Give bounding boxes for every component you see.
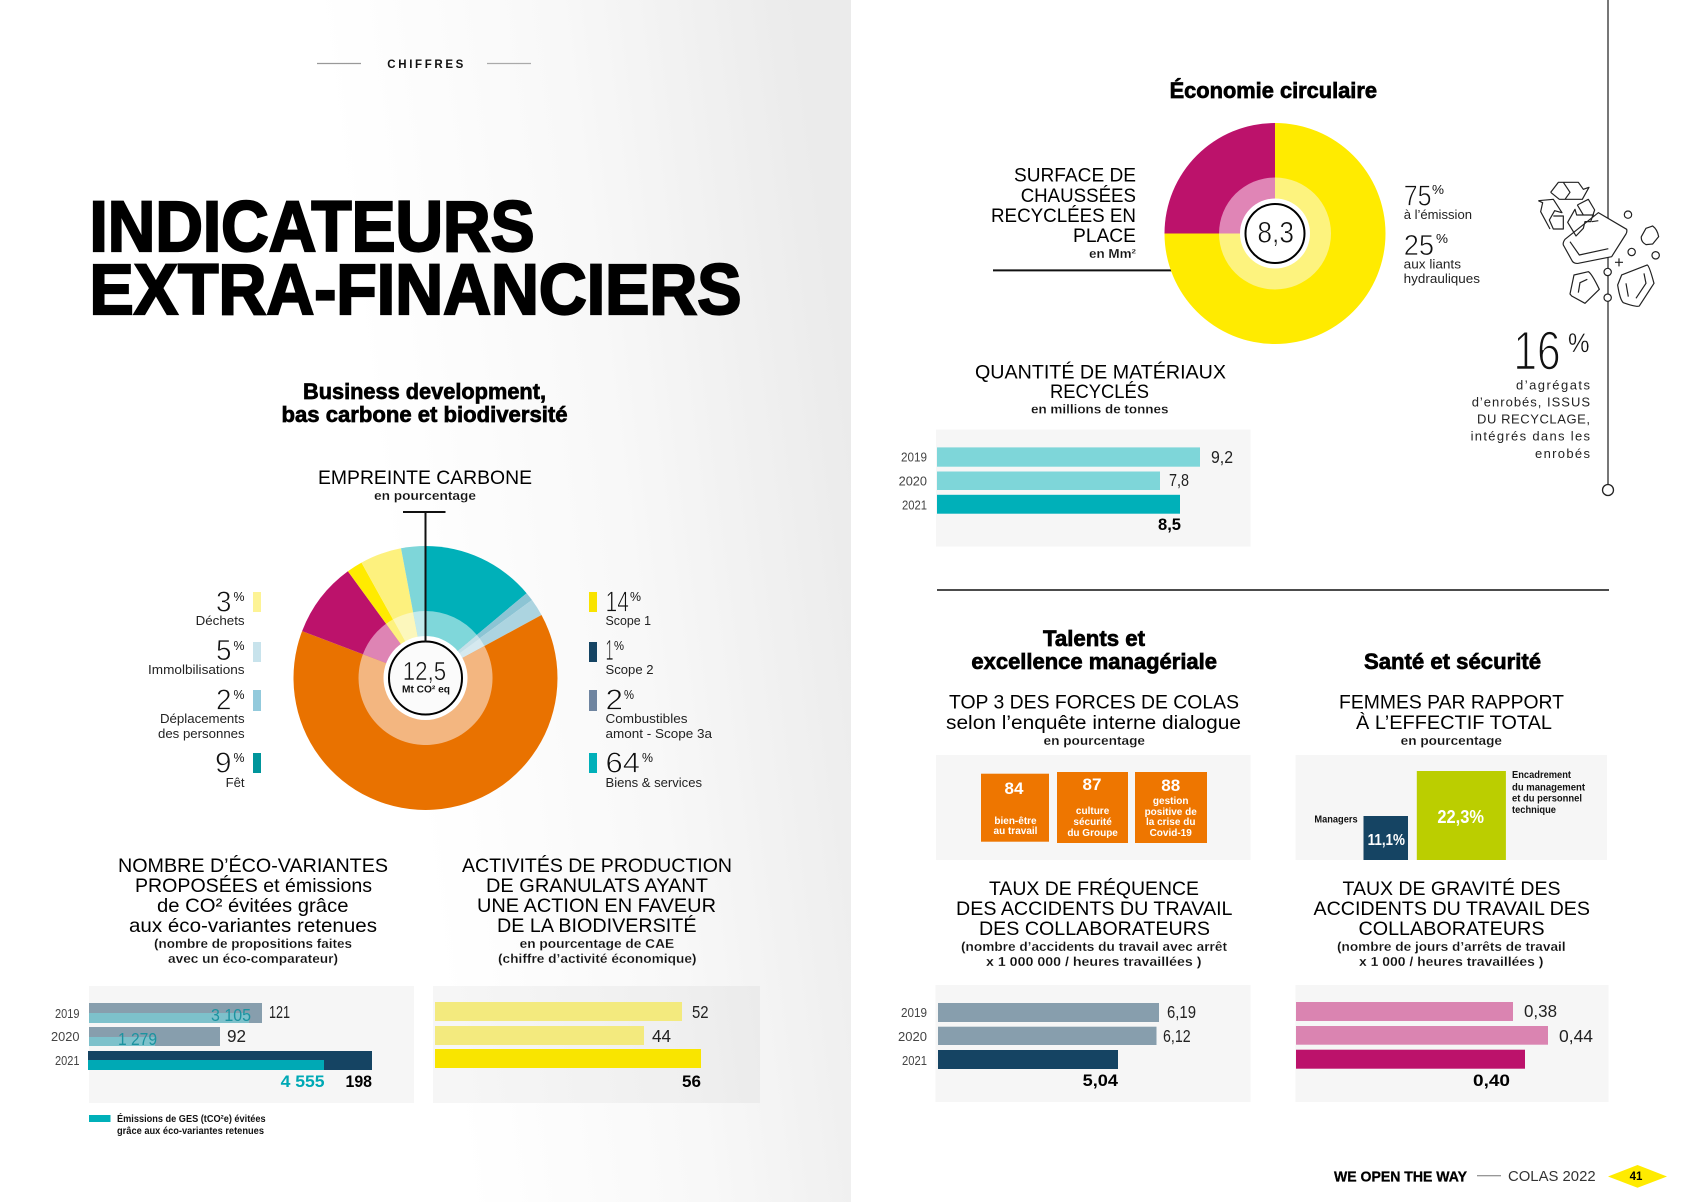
box: 88: Covid-19 — [1150, 828, 1192, 839]
legend item: combustibles: amont - Scope 3a — [606, 726, 713, 741]
legend: 75% et 25%: % — [1436, 231, 1448, 246]
heading: éco-variantes: de CO² évitées grâce — [157, 895, 348, 917]
heading: top 3: en pourcentage — [1044, 733, 1145, 748]
footer: WE OPEN THE WAY — [1334, 1170, 1467, 1186]
legend item: déplacements: % — [234, 687, 245, 702]
bar chart: éco-variantes: 2021 — [55, 1054, 80, 1068]
legend item: immobilisations: 5 — [216, 635, 232, 667]
bar chart: matériaux recyclés — [899, 430, 1250, 547]
heading: taux de fréquence — [956, 877, 1233, 969]
heading: top 3: TOP 3 DES FORCES DE COLAS — [949, 692, 1239, 714]
heading: taux de fréquence: DES ACCIDENTS DU TRAVAIL — [956, 898, 1233, 920]
bar chart: taux de fréquence — [898, 985, 1250, 1102]
donut chart: empreinte carbone — [293, 512, 557, 810]
heading: femmes: FEMMES PAR RAPPORT — [1339, 692, 1564, 714]
legend item: biens et services — [589, 748, 702, 790]
donut chart: empreinte carbone: 12,5 — [403, 656, 446, 686]
legend item: déchets: % — [234, 589, 245, 604]
section label: chiffres: CHIFFRES — [387, 59, 464, 71]
bar chart: granulats: 52 — [692, 1002, 709, 1022]
heading: matériaux recyclés — [975, 360, 1226, 417]
legend item: scope 1: 14 — [606, 586, 629, 618]
panel: femmes: Managers — [1314, 815, 1358, 826]
heading: granulats: UNE ACTION EN FAVEUR — [477, 895, 716, 917]
panel: femmes — [1296, 755, 1607, 860]
bar chart: éco-variantes: 1 279 — [118, 1029, 157, 1049]
bar chart: éco-variantes: 3 105 — [211, 1005, 251, 1025]
text: surface de chaussées: RECYCLÉES EN — [991, 204, 1136, 227]
legend item: scope 1: Scope 1 — [606, 613, 651, 628]
legend: émissions de GES: grâce aux éco-variantes retenues — [117, 1126, 264, 1137]
legend item: déplacements: des personnes — [158, 726, 245, 741]
heading: taux de fréquence: (nombre d’accidents du travail avec arrêt — [961, 939, 1228, 954]
icon: recycling and aggregates — [1538, 182, 1659, 306]
panel: femmes: 11,1% — [1368, 832, 1405, 849]
text: surface de chaussées: en Mm² — [1089, 246, 1137, 261]
legend item: scope 2: Scope 2 — [606, 662, 654, 677]
bar chart: taux de fréquence: 6,12 — [1163, 1026, 1191, 1046]
box: 88: la crise du — [1146, 817, 1195, 828]
legend: 75% et 25%: à l’émission — [1404, 207, 1472, 222]
box: 87 — [1057, 772, 1128, 843]
bar chart: matériaux recyclés: 2019 — [901, 450, 927, 464]
legend item: biens et services: % — [642, 750, 653, 765]
stat: 16%: DU RECYCLAGE, — [1477, 412, 1590, 427]
footer: COLAS 2022 — [1508, 1168, 1596, 1185]
box: 88 — [1135, 772, 1207, 843]
title: EXTRA-FINANCIERS — [90, 251, 742, 330]
footer — [1334, 1165, 1667, 1188]
text: surface de chaussées: PLACE — [1073, 225, 1136, 247]
vertical rule with end node — [1602, 0, 1614, 496]
box: 87: du Groupe — [1067, 828, 1118, 839]
box: 87: sécurité — [1073, 817, 1112, 828]
stat: 16%: 16 — [1513, 320, 1561, 382]
legend: 75% et 25%: aux liants — [1404, 256, 1462, 272]
box: 84 — [981, 774, 1049, 842]
legend: 75% et 25%: hydrauliques — [1404, 271, 1481, 286]
box: 84: bien-être — [994, 816, 1037, 827]
box: 88: positive de — [1145, 807, 1197, 818]
box: 87: 87 — [1083, 775, 1101, 794]
bar chart: matériaux recyclés: 9,2 — [1211, 447, 1233, 467]
box: 88: 88 — [1161, 776, 1180, 795]
legend item: fêt: Fêt — [226, 775, 245, 790]
heading: talents — [971, 626, 1217, 674]
heading: taux de fréquence: TAUX DE FRÉQUENCE — [989, 877, 1199, 900]
heading: santé et sécurité: Santé et sécurité — [1364, 649, 1541, 674]
heading: femmes — [1339, 692, 1564, 748]
legend item: combustibles — [589, 684, 713, 741]
bar chart: éco-variantes: 4 555 — [281, 1072, 325, 1091]
heading: matériaux recyclés: RECYCLÉS — [1050, 380, 1149, 403]
heading: matériaux recyclés: en millions de tonnes — [1031, 402, 1168, 417]
donut chart: surface recyclée: 8,3 — [1257, 217, 1294, 250]
heading: taux de gravité: x 1 000 / heures travaillées ) — [1359, 954, 1543, 969]
text: surface de chaussées — [991, 164, 1172, 270]
bar chart: taux de gravité: 0,40 — [1473, 1071, 1510, 1090]
heading: taux de fréquence: DES COLLABORATEURS — [979, 918, 1210, 940]
stat: 16%: d’agrégats — [1516, 378, 1590, 393]
page number badge — [1608, 1165, 1667, 1188]
legend item: combustibles: Combustibles — [606, 711, 688, 726]
legend item: scope 1: % — [630, 589, 641, 604]
heading: éco-variantes: aux éco-variantes retenues — [129, 915, 377, 937]
stat: 16%: % — [1568, 328, 1590, 358]
donut chart: surface recyclée — [1164, 123, 1386, 344]
heading: granulats — [462, 854, 732, 966]
heading: matériaux recyclés: QUANTITÉ DE MATÉRIAUX — [975, 360, 1226, 384]
heading: granulats: (chiffre d’activité économique) — [498, 951, 696, 966]
title — [90, 188, 742, 330]
title: INDICATEURS — [90, 188, 534, 267]
bar chart: granulats: 44 — [652, 1026, 671, 1046]
heading: éco-variantes: (nombre de propositions faites — [154, 936, 352, 951]
bar chart: matériaux recyclés: 8,5 — [1158, 515, 1181, 534]
heading: business development: Business development, — [303, 379, 546, 404]
bar chart: taux de fréquence: 5,04 — [1083, 1071, 1119, 1090]
heading: taux de gravité — [1314, 877, 1590, 969]
legend item: scope 2: % — [614, 638, 624, 653]
bar chart: taux de gravité — [1296, 985, 1608, 1102]
heading: empreinte carbone: en pourcentage — [374, 488, 476, 503]
page number badge: 41 — [1630, 1171, 1643, 1183]
heading: empreinte carbone — [318, 467, 532, 503]
bar chart: éco-variantes: 121 — [269, 1002, 290, 1022]
legend: émissions de GES — [89, 1112, 266, 1137]
legend item: fêt: % — [234, 750, 245, 765]
legend item: fêt — [215, 748, 261, 790]
legend item: combustibles: % — [624, 687, 634, 702]
heading: éco-variantes: PROPOSÉES et émissions — [135, 874, 372, 897]
bar chart: matériaux recyclés: 2021 — [902, 498, 927, 512]
legend item: scope 1 — [589, 586, 651, 628]
box: 88: gestion — [1153, 796, 1188, 807]
panel: femmes: et du personnel — [1512, 794, 1582, 805]
heading: granulats: en pourcentage de CAE — [520, 936, 674, 951]
heading: femmes: en pourcentage — [1401, 733, 1502, 748]
heading: empreinte carbone: EMPREINTE CARBONE — [318, 467, 532, 489]
bar chart: éco-variantes: 2020 — [51, 1030, 80, 1044]
bar chart: granulats: 56 — [682, 1072, 701, 1091]
legend item: déplacements: 2 — [216, 684, 232, 716]
heading: taux de gravité: COLLABORATEURS — [1358, 918, 1544, 940]
heading: talents: excellence managériale — [971, 649, 1217, 674]
panel: femmes: technique — [1512, 805, 1556, 816]
bar chart: éco-variantes — [51, 986, 414, 1103]
bar chart: matériaux recyclés: 2020 — [899, 474, 927, 488]
legend item: fêt: 9 — [215, 748, 232, 780]
panel: femmes: 22,3% — [1437, 807, 1484, 827]
bar chart: taux de gravité: 0,38 — [1524, 1001, 1557, 1021]
bar chart: éco-variantes: 92 — [227, 1026, 246, 1046]
legend item: déplacements — [158, 684, 261, 741]
legend item: immobilisations: Immolbilisations — [148, 662, 245, 677]
legend item: biens et services: 64 — [606, 748, 640, 780]
heading: taux de gravité: ACCIDENTS DU TRAVAIL DES — [1314, 898, 1590, 920]
legend item: déchets: Déchets — [196, 613, 245, 628]
legend item: biens et services: Biens & services — [606, 775, 702, 790]
heading: taux de gravité: TAUX DE GRAVITÉ DES — [1342, 877, 1560, 900]
heading: granulats: DE LA BIODIVERSITÉ — [497, 914, 696, 937]
heading: talents: Talents et — [1043, 626, 1146, 651]
legend: 75% et 25% — [1404, 180, 1481, 286]
legend item: immobilisations — [148, 635, 261, 677]
box: 87: culture — [1076, 806, 1110, 817]
text: surface de chaussées: CHAUSSÉES — [1021, 184, 1136, 207]
bar chart: taux de gravité: 0,44 — [1559, 1026, 1593, 1046]
heading: top 3: selon l’enquête interne dialogue — [946, 712, 1241, 734]
stat: 16%: intégrés dans les — [1471, 429, 1590, 444]
heading: éco-variantes — [118, 854, 388, 966]
heading: taux de gravité: (nombre de jours d’arrêts de travail — [1337, 939, 1566, 954]
legend: émissions de GES: Émissions de GES (tCO²e) évitées — [117, 1112, 266, 1125]
heading: top 3 — [946, 692, 1241, 748]
heading: granulats: ACTIVITÉS DE PRODUCTION — [462, 854, 732, 877]
legend item: scope 2 — [589, 635, 654, 677]
bar chart: taux de fréquence: 2021 — [902, 1054, 927, 1068]
legend item: immobilisations: % — [234, 638, 245, 653]
heading: granulats: DE GRANULATS AYANT — [486, 875, 708, 897]
legend item: déchets: 3 — [216, 586, 232, 618]
legend item: déplacements: Déplacements — [160, 711, 245, 726]
heading: business development — [282, 379, 568, 427]
heading: femmes: À L’EFFECTIF TOTAL — [1356, 711, 1552, 734]
heading: business development: bas carbone et biodiversité — [282, 402, 568, 427]
donut chart: empreinte carbone: Mt CO² eq — [402, 684, 450, 696]
stat: 16% — [1471, 320, 1590, 461]
bar chart: éco-variantes: 2019 — [55, 1007, 80, 1021]
legend item: combustibles: 2 — [606, 684, 623, 716]
bar chart: matériaux recyclés: 7,8 — [1169, 470, 1189, 490]
legend: 75% et 25%: % — [1432, 182, 1444, 197]
box: 84: 84 — [1005, 779, 1024, 798]
stat: 16%: enrobés — [1535, 446, 1590, 461]
legend item: scope 2: 1 — [606, 635, 614, 667]
legend: 75% et 25%: 75 — [1404, 180, 1432, 212]
panel: femmes: du management — [1512, 783, 1586, 794]
stat: 16%: d’enrobés, ISSUS — [1472, 395, 1590, 410]
text: surface de chaussées: SURFACE DE — [1014, 164, 1136, 186]
bar chart: éco-variantes: 198 — [346, 1072, 372, 1091]
heading: taux de fréquence: x 1 000 000 / heures travaillées ) — [986, 954, 1202, 969]
legend: left items — [148, 586, 261, 790]
bar chart: taux de fréquence: 2019 — [901, 1006, 927, 1020]
heading: économie circulaire: Économie circulaire — [1170, 78, 1377, 103]
bar chart: taux de fréquence: 6,19 — [1167, 1002, 1196, 1022]
legend: 75% et 25%: 25 — [1404, 230, 1434, 262]
box: 84: au travail — [994, 826, 1038, 837]
panel: top 3 forces — [936, 755, 1251, 860]
bar chart: granulats — [433, 986, 760, 1103]
heading: éco-variantes: NOMBRE D’ÉCO-VARIANTES — [118, 854, 388, 877]
heading: éco-variantes: avec un éco-comparateur) — [168, 951, 338, 966]
legend: right items — [589, 586, 713, 790]
panel: femmes: Encadrement — [1512, 770, 1572, 781]
legend item: déchets — [196, 586, 261, 628]
bar chart: taux de fréquence: 2020 — [898, 1030, 927, 1044]
